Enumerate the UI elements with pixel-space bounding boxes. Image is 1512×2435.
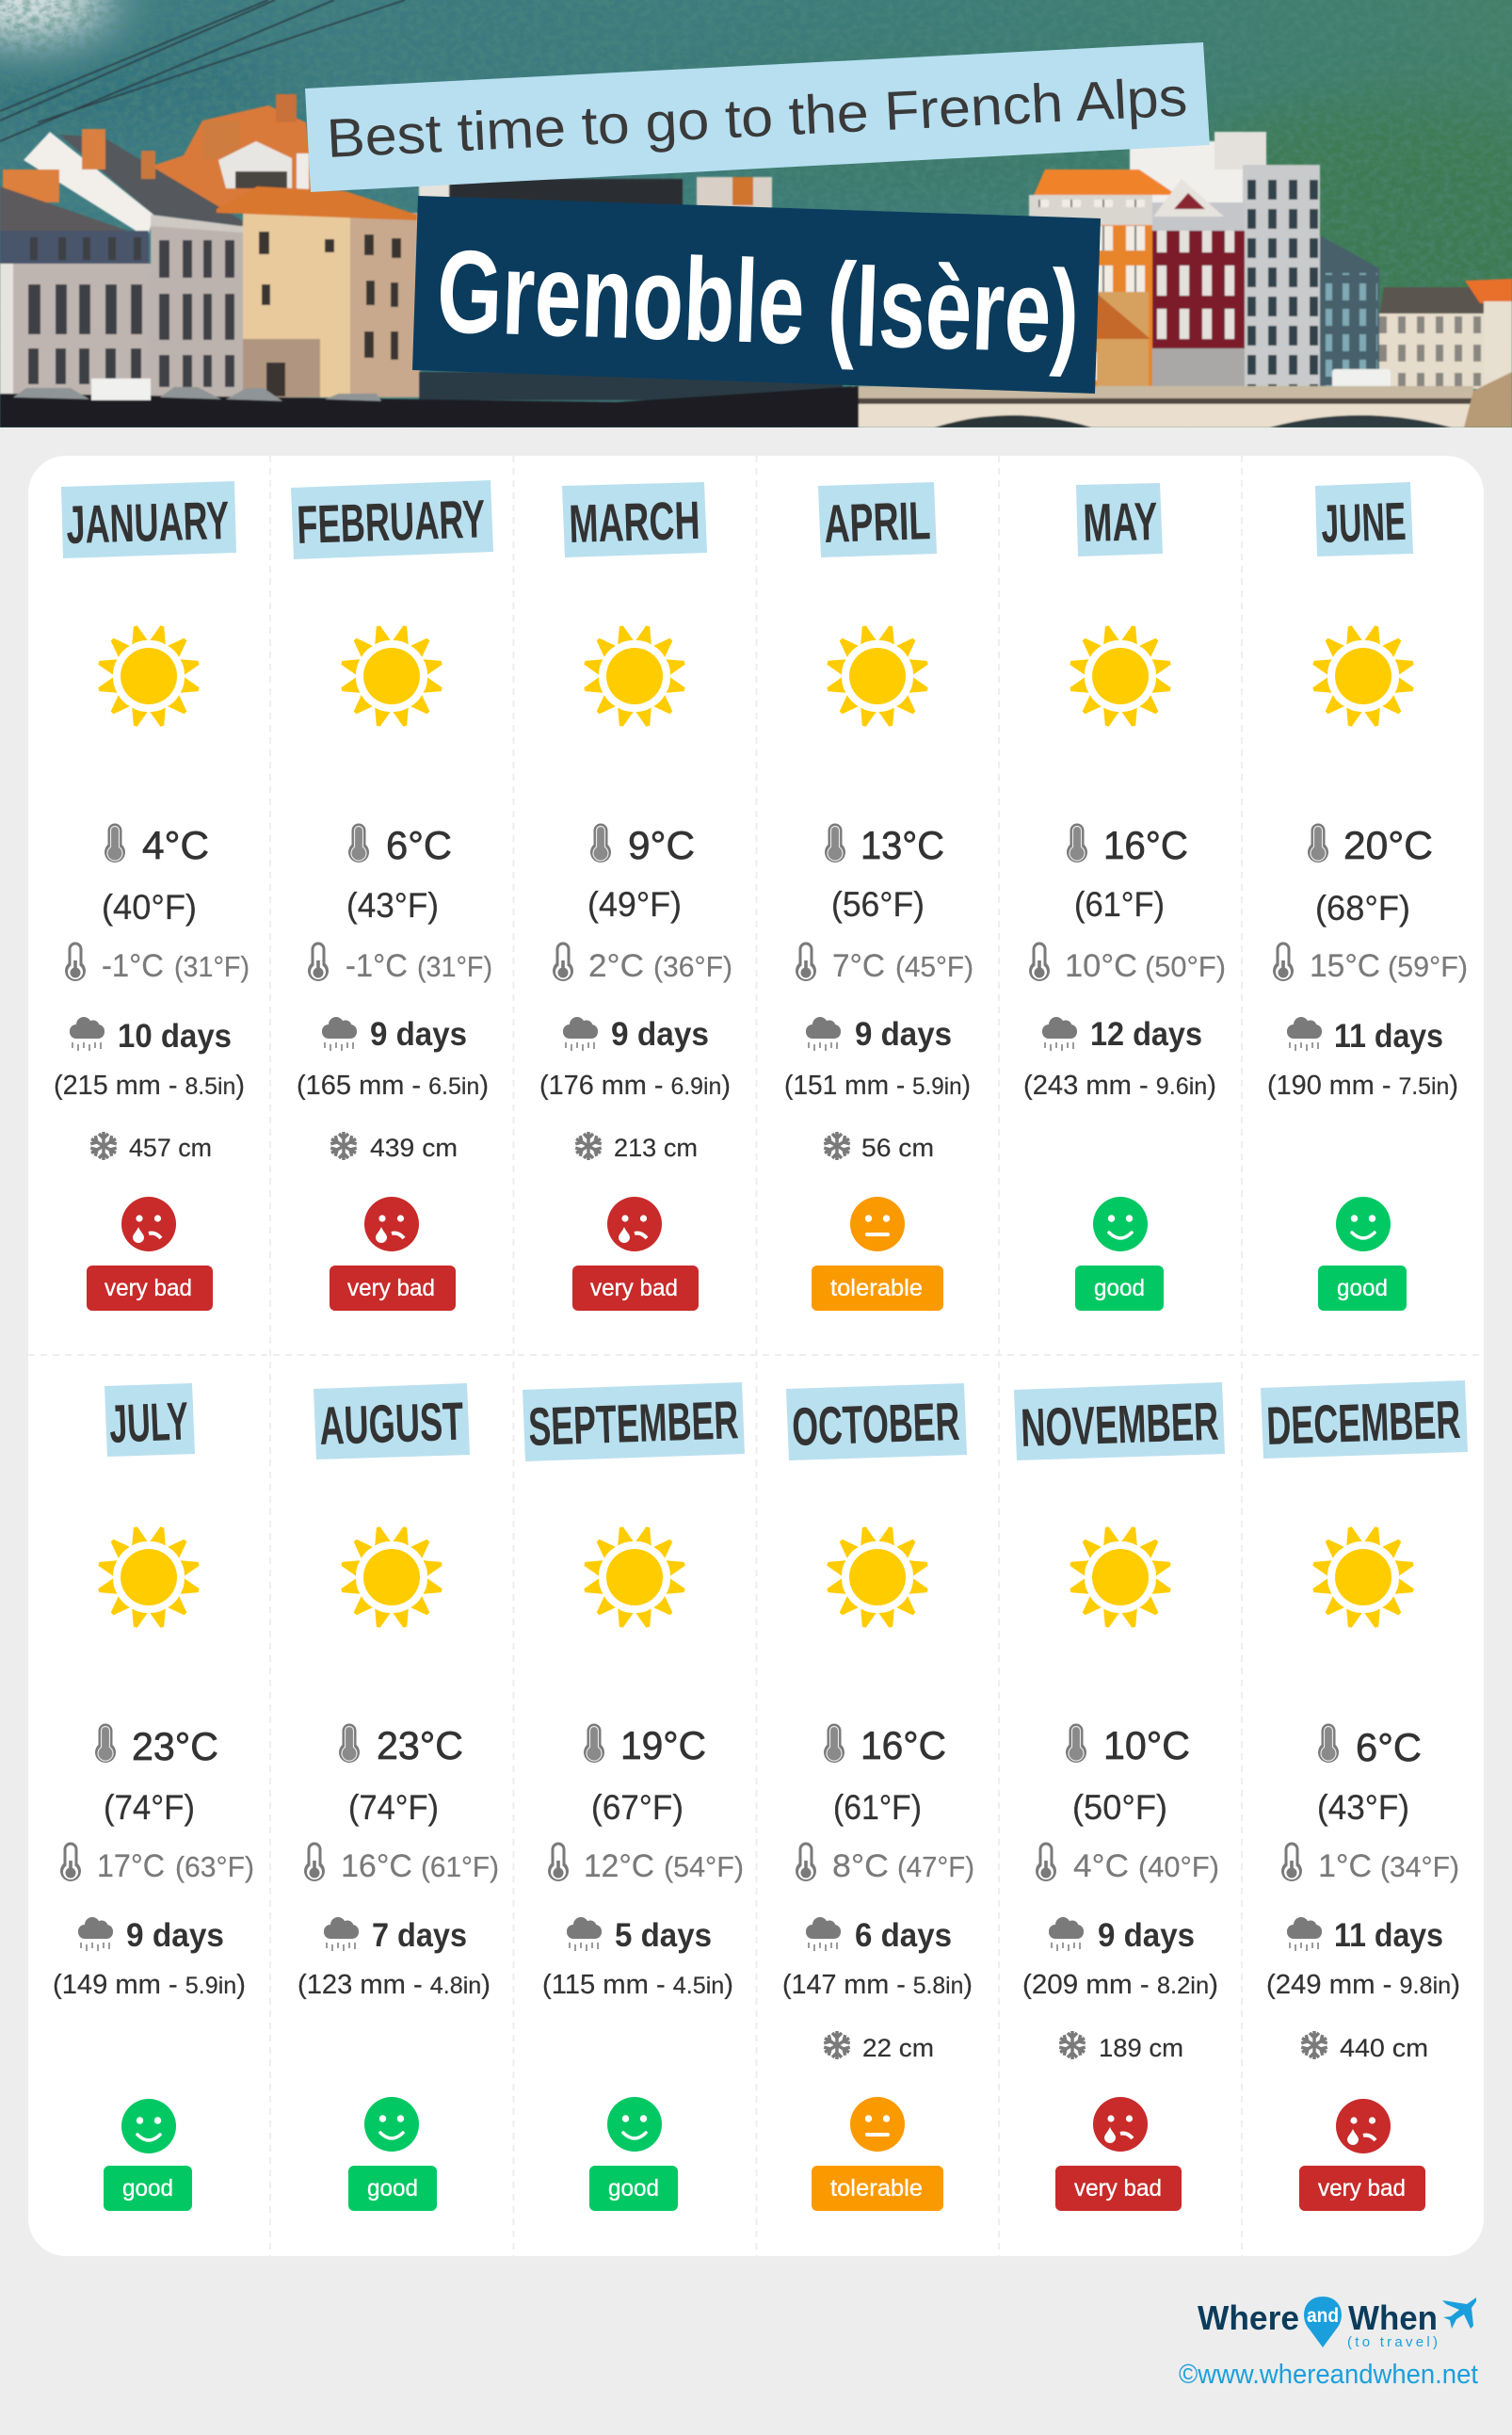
chimneys	[82, 129, 105, 169]
month: September	[523, 1382, 745, 1461]
low temperature: (31°F)	[417, 950, 492, 983]
high temperature fahrenheit: (49°F)	[587, 885, 682, 924]
high temperature: 19°C	[620, 1723, 706, 1767]
high temperature fahrenheit: (50°F)	[1072, 1788, 1167, 1827]
high temperature fahrenheit: (43°F)	[346, 886, 439, 925]
dark teal building	[1320, 235, 1379, 388]
low temperature: 15°C	[1310, 948, 1380, 984]
rainfall: (176 mm - 6.9in)	[539, 1071, 731, 1101]
icon: sun	[97, 1525, 201, 1629]
river wall	[0, 386, 859, 427]
low temperature: (40°F)	[1138, 1850, 1219, 1883]
rating badge: good: good	[1094, 1275, 1145, 1301]
snowfall	[1300, 2031, 1428, 2062]
rating badge: good: good	[367, 2175, 418, 2201]
icon: sun	[583, 624, 686, 728]
high temperature: 13°C	[861, 823, 944, 867]
month: May: MAY	[1083, 492, 1158, 554]
low temperature: (59°F)	[1388, 950, 1468, 983]
icon: sun	[583, 1525, 686, 1629]
rating face: tolerable	[850, 1197, 905, 1251]
icon: sun	[1069, 624, 1172, 728]
high temperature: 16°C	[861, 1723, 946, 1767]
rating badge: tolerable	[812, 2166, 943, 2211]
icon: sun	[1069, 1525, 1172, 1629]
high temperature: 16°C	[1103, 823, 1188, 867]
rainfall: (147 mm - 5.8in)	[782, 1970, 973, 2000]
panel: June	[1267, 482, 1468, 1311]
rating badge: tolerable: tolerable	[830, 2175, 923, 2201]
rating badge: very bad: very bad	[347, 1275, 435, 1301]
month: March	[562, 482, 707, 557]
panel: May	[1023, 483, 1226, 1311]
high temperature fahrenheit: (43°F)	[1317, 1788, 1409, 1827]
orange corner building	[1034, 169, 1177, 195]
rainfall: (115 mm - 4.5in)	[542, 1970, 733, 2000]
rainy days: 12 days	[1090, 1016, 1202, 1053]
rating badge: very bad	[1055, 2166, 1182, 2211]
low temperature: 8°C	[832, 1848, 889, 1884]
rating badge: good	[104, 2166, 192, 2211]
low temperature: (61°F)	[421, 1850, 499, 1883]
low temperature: 4°C	[1073, 1848, 1129, 1884]
month: November: NOVEMBER	[1020, 1392, 1219, 1459]
high temperature	[339, 1723, 463, 1767]
icon: sun	[340, 624, 443, 728]
rating face: very bad	[1093, 2097, 1148, 2152]
rainy days	[324, 1917, 467, 1954]
icon: sun	[340, 1525, 443, 1629]
high temperature	[590, 823, 695, 867]
month: June	[1315, 482, 1413, 556]
title text: Grenoble (Isère)	[435, 226, 1081, 379]
high temperature	[825, 823, 944, 867]
rainfall: (165 mm - 6.5in)	[297, 1071, 489, 1101]
rainy days: 6 days	[855, 1917, 952, 1954]
panel: November	[1014, 1382, 1225, 2211]
rainy days: 9 days	[1098, 1917, 1195, 1954]
rainy days	[78, 1917, 224, 1954]
rainy days: 10 days	[118, 1018, 232, 1055]
icon: map pin with "and": and	[1307, 2305, 1339, 2327]
low temperature: (45°F)	[895, 950, 973, 983]
high temperature	[105, 823, 209, 867]
slate roof	[59, 135, 254, 228]
icon: map pin with "and"	[1304, 2297, 1342, 2347]
rating face: good	[607, 2097, 662, 2152]
snowfall: 440 cm	[1340, 2034, 1428, 2062]
snowfall	[89, 1132, 212, 1162]
low temperature: (31°F)	[174, 950, 249, 983]
high temperature: 6°C	[1356, 1725, 1422, 1769]
low temperature	[1273, 942, 1468, 984]
icon: sun	[1311, 624, 1415, 728]
month: April	[818, 482, 937, 557]
rainy days: 9 days	[126, 1917, 224, 1954]
footer logo: Where and When	[1198, 2297, 1476, 2350]
rating badge: very bad	[572, 1266, 699, 1311]
low temperature: -1°C	[346, 948, 408, 984]
icon: sun	[1311, 1525, 1415, 1629]
dark middle buildings	[419, 179, 683, 212]
rainy days	[1042, 1016, 1202, 1053]
month: February	[291, 480, 493, 559]
high temperature	[1067, 823, 1188, 867]
panel: March	[539, 482, 732, 1311]
rating badge: very bad	[1299, 2166, 1425, 2211]
rainy days	[563, 1016, 709, 1053]
high temperature fahrenheit: (40°F)	[102, 888, 197, 927]
month: January	[61, 481, 236, 558]
low temperature: 1°C	[1318, 1848, 1372, 1884]
low temperature	[1281, 1842, 1459, 1884]
snowfall	[823, 2031, 934, 2062]
rainy days	[1287, 1017, 1443, 1055]
high temperature	[584, 1723, 706, 1767]
rainy days	[806, 1917, 952, 1954]
low temperature: 12°C	[584, 1848, 654, 1884]
month: April: APRIL	[823, 491, 931, 555]
low temperature: 10°C	[1065, 948, 1137, 984]
snowfall: 213 cm	[614, 1134, 698, 1162]
rating face: very bad	[121, 1197, 176, 1251]
snowfall: 457 cm	[129, 1134, 212, 1162]
rating badge: good: good	[1337, 1275, 1388, 1301]
high temperature fahrenheit: (61°F)	[833, 1788, 922, 1827]
rainfall: (209 mm - 8.2in)	[1022, 1970, 1218, 2000]
month: March: MARCH	[568, 491, 700, 555]
snowfall: 56 cm	[861, 1134, 934, 1162]
snowfall	[823, 1132, 934, 1162]
snowfall	[574, 1132, 698, 1162]
rating badge: good	[1075, 1266, 1164, 1311]
month: November	[1014, 1382, 1225, 1460]
rating badge: very bad	[87, 1266, 213, 1311]
rating badge: good: good	[608, 2175, 659, 2201]
rating badge: very bad: very bad	[590, 1275, 678, 1301]
high temperature	[1318, 1723, 1422, 1769]
rating face: good	[1093, 1197, 1148, 1251]
rainy days	[1287, 1917, 1443, 1954]
panel: October	[782, 1383, 974, 2211]
month: October: OCTOBER	[791, 1392, 960, 1458]
rainfall: (215 mm - 8.5in)	[54, 1071, 245, 1101]
rainfall: (149 mm - 5.9in)	[53, 1970, 246, 2000]
panel: December	[1261, 1380, 1468, 2211]
low temperature: 7°C	[832, 948, 885, 984]
rainy days: 11 days	[1334, 1917, 1443, 1954]
rating badge: very bad: very bad	[1318, 2175, 1406, 2201]
rating face: very bad	[607, 1197, 662, 1251]
low temperature	[65, 942, 249, 984]
month: January: JANUARY	[65, 491, 230, 556]
low temperature	[60, 1842, 254, 1884]
low temperature: (34°F)	[1380, 1850, 1459, 1883]
snowfall: 439 cm	[370, 1134, 458, 1162]
low temperature: (54°F)	[664, 1850, 744, 1883]
rainy days: 9 days	[855, 1016, 952, 1053]
low temperature: (36°F)	[653, 950, 732, 983]
month: June: JUNE	[1320, 492, 1407, 555]
high temperature: 20°C	[1343, 823, 1433, 867]
rainfall: (249 mm - 9.8in)	[1266, 1970, 1460, 2000]
high temperature fahrenheit: (74°F)	[104, 1788, 195, 1827]
high temperature: 10°C	[1103, 1723, 1190, 1767]
low temperature	[304, 1842, 499, 1884]
rating badge: tolerable	[812, 1266, 943, 1311]
snowfall	[1058, 2031, 1183, 2062]
panel: September	[523, 1382, 745, 2211]
high temperature fahrenheit: (56°F)	[831, 885, 925, 924]
tree right	[1464, 372, 1512, 427]
rainy days	[322, 1016, 467, 1053]
footer website credit: ©www.whereandwhen.net	[1179, 2360, 1478, 2390]
month: September: SEPTEMBER	[527, 1390, 739, 1458]
month: May	[1076, 483, 1163, 556]
low temperature	[1029, 942, 1226, 984]
rating badge: good: good	[122, 2175, 173, 2201]
month: August	[314, 1383, 470, 1459]
high temperature fahrenheit: (74°F)	[348, 1788, 439, 1827]
month: July	[105, 1383, 195, 1457]
low temperature	[796, 942, 973, 984]
high temperature fahrenheit: (67°F)	[591, 1788, 684, 1827]
rating badge: tolerable: tolerable	[830, 1275, 923, 1301]
white tall building	[1130, 141, 1252, 207]
rainy days: 11 days	[1334, 1018, 1443, 1055]
panel: April	[784, 482, 973, 1311]
panel: August	[298, 1383, 499, 2211]
van right	[1332, 369, 1391, 388]
rainy days: 7 days	[372, 1917, 467, 1954]
rainy days: 9 days	[611, 1016, 709, 1053]
bridge	[857, 403, 1471, 427]
rainy days	[70, 1017, 232, 1055]
parked cars	[13, 387, 381, 401]
rainfall: (243 mm - 9.6in)	[1023, 1071, 1216, 1101]
rating face: good	[121, 2099, 176, 2153]
snowfall: 189 cm	[1099, 2034, 1183, 2062]
icon: sun	[826, 624, 929, 728]
rating face: good	[1336, 1197, 1391, 1251]
rainy days: 9 days	[370, 1016, 467, 1053]
footer logo: Where and When: Where	[1198, 2298, 1299, 2337]
title banner	[412, 196, 1101, 394]
rating badge: very bad: very bad	[105, 1275, 192, 1301]
low temperature: 16°C	[341, 1848, 412, 1884]
crimson building	[1151, 230, 1246, 349]
rating badge: good	[348, 2166, 437, 2211]
rainy days	[1049, 1917, 1195, 1954]
high temperature: 23°C	[132, 1724, 218, 1768]
low temperature: -1°C	[102, 948, 164, 984]
rating badge: very bad	[330, 1266, 456, 1311]
high temperature	[1066, 1723, 1190, 1767]
high temperature	[824, 1723, 946, 1767]
high temperature: 6°C	[386, 823, 452, 867]
icon: plane	[1442, 2298, 1476, 2329]
rating face: very bad	[1336, 2099, 1391, 2153]
panel: white calendar card	[28, 456, 1484, 2256]
high temperature fahrenheit: (68°F)	[1315, 889, 1410, 927]
month: October	[786, 1383, 967, 1460]
left facade	[0, 264, 151, 397]
rating badge: good	[1318, 1266, 1407, 1311]
low temperature: (47°F)	[897, 1850, 974, 1883]
rainy days	[806, 1016, 952, 1053]
white gable	[24, 132, 153, 238]
rear orange rooftops	[141, 105, 315, 215]
high temperature: 23°C	[377, 1723, 463, 1767]
right building	[1465, 279, 1512, 303]
month: February: FEBRUARY	[296, 489, 486, 556]
footer logo: Where and When: (to travel)	[1347, 2334, 1438, 2350]
month: August: AUGUST	[318, 1392, 464, 1457]
low temperature: 2°C	[588, 948, 644, 984]
rainfall: (151 mm - 5.9in)	[784, 1071, 971, 1101]
low temperature	[1036, 1842, 1219, 1884]
high temperature fahrenheit: (61°F)	[1074, 885, 1165, 924]
low temperature	[308, 942, 492, 984]
panel: February	[291, 480, 493, 1311]
subtitle text: Best time to go to the French Alps	[325, 66, 1189, 169]
rating face: very bad	[364, 1197, 419, 1251]
low temperature	[548, 1842, 744, 1884]
middle facade	[151, 226, 245, 397]
rating face: tolerable	[850, 2097, 905, 2152]
rainy days: 5 days	[615, 1917, 712, 1954]
month: July: JULY	[108, 1391, 189, 1455]
icon: sun	[97, 624, 201, 728]
snowfall	[330, 1132, 458, 1162]
left mansard roof	[0, 186, 151, 273]
low temperature: (63°F)	[175, 1850, 254, 1883]
header photo: Grenoble buildings with mountain behind	[0, 0, 1512, 427]
icon: sun	[826, 1525, 929, 1629]
footer logo: Where and When: When	[1348, 2298, 1438, 2337]
high temperature: 4°C	[142, 823, 209, 867]
rating badge: good	[589, 2166, 678, 2211]
low temperature	[796, 1842, 974, 1884]
high temperature	[348, 823, 452, 867]
panel: July	[53, 1383, 254, 2211]
subtitle banner	[305, 42, 1210, 192]
rainy days	[567, 1917, 712, 1954]
cream building	[243, 211, 350, 397]
rating badge: very bad: very bad	[1074, 2175, 1162, 2201]
low temperature	[553, 942, 732, 984]
low temperature: (50°F)	[1145, 950, 1226, 983]
panel: January	[54, 481, 249, 1311]
low temperature: 17°C	[97, 1848, 165, 1884]
rainfall: (190 mm - 7.5in)	[1267, 1071, 1458, 1101]
high temperature	[95, 1723, 218, 1768]
rainfall: (123 mm - 4.8in)	[298, 1970, 491, 2000]
rating face: good	[364, 2097, 419, 2152]
high temperature: 9°C	[628, 823, 695, 867]
far cream building	[1379, 287, 1488, 315]
snowfall: 22 cm	[862, 2034, 934, 2062]
